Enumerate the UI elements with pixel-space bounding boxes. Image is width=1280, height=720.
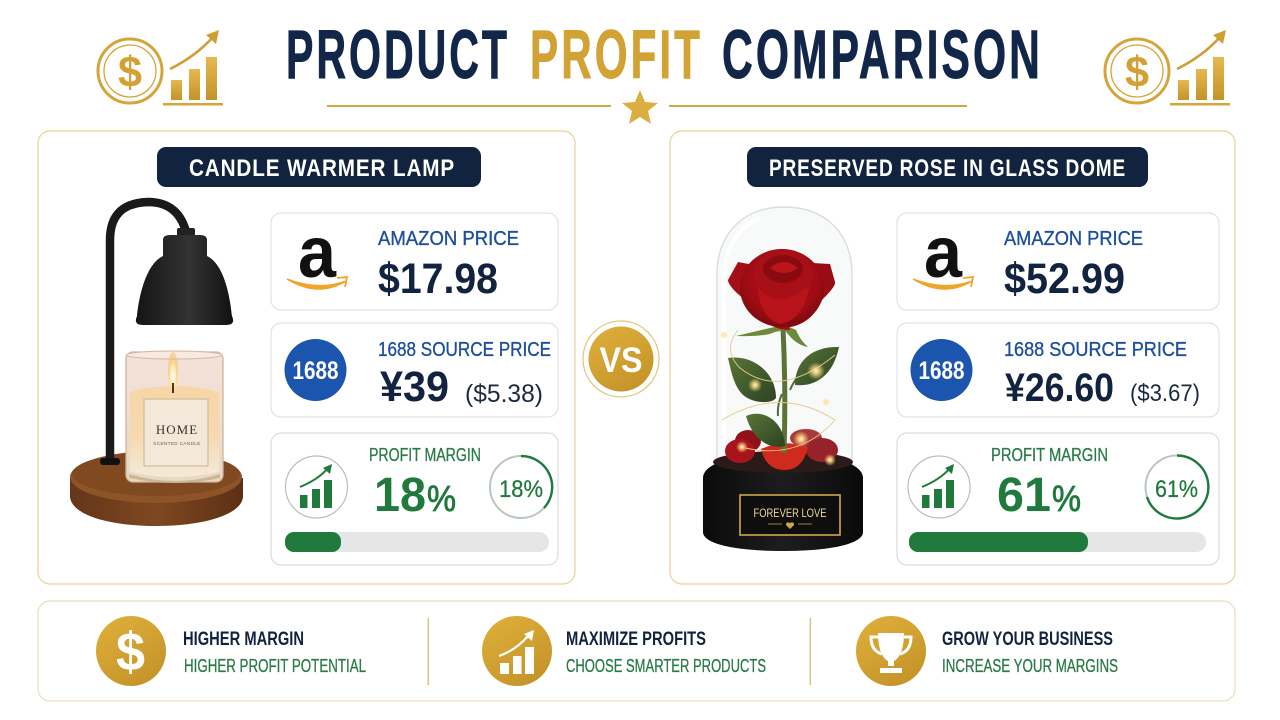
card: amazon price: AMAZON PRICE — [378, 228, 519, 250]
card: profit margin: PROFIT MARGIN — [991, 445, 1108, 465]
margin value: % — [1052, 478, 1081, 519]
margin ring: 61% — [1155, 476, 1198, 503]
card: amazon price: AMAZON PRICE — [1004, 228, 1143, 250]
illustration: candle warmer lamp — [70, 202, 243, 526]
product name pill — [157, 147, 481, 187]
rose head — [728, 249, 835, 330]
panel: preserved rose — [670, 131, 1235, 584]
title divider with star — [327, 90, 967, 124]
card: profit margin — [897, 433, 1219, 565]
illustration: rose in glass dome — [703, 207, 863, 551]
card: 1688 source price: ¥39 — [380, 363, 449, 411]
icon: 1688 logo: 1688 — [918, 357, 965, 385]
product name pill: PRESERVED ROSE IN GLASS DOME — [769, 155, 1126, 182]
benefit: higher margin: $ — [116, 622, 145, 682]
icon: 1688 logo — [284, 339, 346, 401]
benefit: higher margin: HIGHER MARGIN — [183, 629, 304, 650]
product name pill: CANDLE WARMER LAMP — [189, 155, 455, 182]
icon: growth chart — [908, 456, 970, 518]
vs badge: VS — [600, 341, 642, 380]
icon: amazon logo: a — [298, 213, 337, 293]
card: 1688 source price — [897, 323, 1219, 417]
icon: growth chart — [286, 456, 348, 518]
margin value: 18 — [374, 469, 426, 522]
icon: amazon logo — [913, 213, 973, 293]
margin value: 61 — [997, 469, 1051, 522]
card: amazon price: $52.99 — [1004, 255, 1125, 303]
card: profit margin: PROFIT MARGIN — [369, 445, 481, 465]
panel: candle warmer lamp — [38, 131, 575, 584]
card: 1688 source price: 1688 SOURCE PRICE — [378, 339, 551, 361]
card: 1688 source price: ($5.38) — [465, 380, 543, 408]
card: amazon price: $17.98 — [378, 255, 498, 303]
card: profit margin — [271, 433, 558, 565]
title: PROFIT — [530, 16, 703, 93]
product name pill — [747, 147, 1148, 187]
benefit: grow your business: INCREASE YOUR MARGINS — [942, 656, 1118, 676]
petals — [725, 429, 838, 470]
benefit: maximize profits: CHOOSE SMARTER PRODUCTS — [566, 656, 766, 676]
icon: amazon logo: a — [924, 213, 963, 293]
icon: coin and growth chart right: $ — [1125, 48, 1149, 97]
fairy light wire — [722, 330, 835, 451]
benefit: grow your business: GROW YOUR BUSINESS — [942, 629, 1113, 650]
margin ring — [1146, 456, 1208, 518]
panel: benefits strip — [38, 601, 1235, 701]
illustration: candle warmer lamp: SCENTED CANDLE — [153, 441, 201, 446]
forever love plaque: FOREVER LOVE — [754, 506, 826, 520]
icon: amazon logo — [287, 213, 347, 293]
margin ring: 18% — [499, 476, 543, 503]
title — [286, 16, 1043, 93]
card: amazon price — [271, 213, 558, 310]
card: 1688 source price — [271, 323, 558, 417]
vs badge — [583, 321, 659, 397]
icon: coin and growth chart left: $ — [118, 48, 142, 97]
icon: 1688 logo: 1688 — [292, 357, 339, 385]
icon: 1688 logo — [910, 339, 972, 401]
margin ring — [490, 456, 552, 518]
margin value — [374, 469, 456, 522]
benefit: higher margin: HIGHER PROFIT POTENTIAL — [184, 656, 366, 676]
margin progress bar — [285, 532, 549, 552]
fairy lights — [720, 331, 836, 466]
margin progress bar — [909, 532, 1206, 552]
card: amazon price — [897, 213, 1219, 310]
title: PRODUCT — [286, 16, 510, 93]
card: 1688 source price: 1688 SOURCE PRICE — [1004, 339, 1187, 361]
icon: coin and growth chart right — [1105, 30, 1230, 106]
margin value: % — [427, 478, 456, 519]
forever love plaque — [740, 495, 840, 535]
icon: coin and growth chart left — [98, 30, 223, 106]
illustration: candle warmer lamp: HOME — [156, 422, 198, 437]
benefit: maximize profits — [482, 616, 766, 686]
card: 1688 source price: ($3.67) — [1130, 380, 1200, 407]
card: 1688 source price: ¥26.60 — [1005, 366, 1114, 410]
margin value — [997, 469, 1081, 522]
benefit: maximize profits: MAXIMIZE PROFITS — [566, 629, 706, 650]
benefit: grow your business — [856, 616, 1118, 686]
title: COMPARISON — [722, 16, 1043, 93]
benefit: higher margin — [96, 616, 366, 686]
